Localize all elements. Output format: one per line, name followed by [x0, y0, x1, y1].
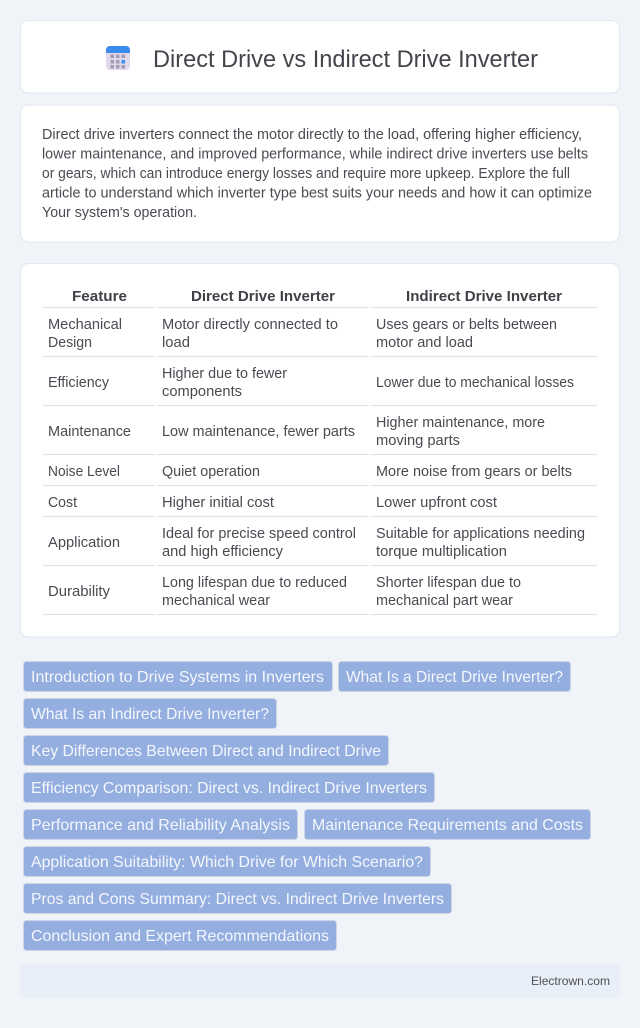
- table header: Indirect Drive Inverter: [406, 288, 562, 305]
- tag: [24, 772, 434, 802]
- tag: [24, 736, 388, 766]
- row: durability: Shorter lifespan due to: [376, 575, 521, 591]
- tag: Introduction to Drive Systems in Inverters: [31, 669, 324, 686]
- row: efficiency: [48, 366, 574, 400]
- header panel: [20, 20, 620, 93]
- icon: calendar: [106, 46, 130, 70]
- tag: [24, 698, 276, 728]
- row: efficiency: Lower due to mechanical losses: [376, 375, 574, 391]
- row: mechanical design: motor and load: [376, 335, 473, 351]
- row: mechanical design: Design: [48, 335, 92, 351]
- tag: What Is an Indirect Drive Inverter?: [31, 706, 269, 723]
- row: noise level: More noise from gears or belts: [376, 464, 572, 480]
- row: cost: [48, 495, 497, 511]
- tag: Conclusion and Expert Recommendations: [31, 928, 329, 945]
- panel: comparison table: [20, 264, 620, 637]
- footer: [20, 964, 620, 998]
- row: application: torque multiplication: [376, 544, 507, 560]
- tag: Efficiency Comparison: Direct vs. Indirect Drive Inverters: [31, 780, 427, 797]
- row: maintenance: [48, 415, 545, 449]
- tag: [24, 920, 336, 950]
- row: maintenance: Low maintenance, fewer parts: [162, 424, 355, 440]
- row: maintenance: Higher maintenance, more: [376, 415, 545, 431]
- row: maintenance: moving parts: [376, 433, 460, 449]
- row: noise level: [48, 464, 572, 480]
- topic tags: [24, 662, 590, 950]
- intro text: lower maintenance, and improved performance, while indirect drive inverters use belts: [42, 146, 588, 162]
- row: mechanical design: load: [162, 335, 190, 351]
- table header: [72, 288, 562, 305]
- tag: Maintenance Requirements and Costs: [312, 817, 583, 834]
- footer: Electrown.com: [531, 974, 610, 988]
- tag: [338, 662, 570, 692]
- row: durability: mechanical wear: [162, 593, 270, 609]
- row: durability: [48, 575, 521, 609]
- row: application: Suitable for applications needing: [376, 526, 585, 542]
- row: application: Application: [48, 535, 120, 551]
- intro text: [42, 127, 592, 221]
- title: Direct Drive vs Indirect Drive Inverter: [153, 46, 538, 73]
- row: durability: Durability: [48, 584, 111, 600]
- row: application: [48, 526, 585, 560]
- table header: Feature: [72, 288, 127, 305]
- row: application: and high efficiency: [162, 544, 284, 560]
- tag: [24, 884, 452, 914]
- row: mechanical design: Mechanical: [48, 317, 122, 333]
- tag: Pros and Cons Summary: Direct vs. Indirect Drive Inverters: [31, 891, 444, 908]
- row: noise level: Noise Level: [48, 464, 120, 480]
- row: maintenance: Maintenance: [48, 424, 131, 440]
- tag: Key Differences Between Direct and Indirect Drive: [31, 743, 381, 760]
- row: noise level: Quiet operation: [162, 464, 260, 480]
- row: mechanical design: Uses gears or belts between: [376, 317, 557, 333]
- intro text: Your system's operation.: [42, 205, 197, 221]
- row: application: Ideal for precise speed control: [162, 526, 356, 542]
- tag: [24, 810, 298, 840]
- tag: Application Suitability: Which Drive for Which Scenario?: [31, 854, 423, 871]
- row: mechanical design: [48, 317, 557, 351]
- intro text: article to understand which inverter type best suits your needs and how it can optimize: [42, 186, 592, 202]
- row: efficiency: Higher due to fewer: [162, 366, 287, 382]
- row: efficiency: components: [162, 384, 242, 400]
- table header: Direct Drive Inverter: [191, 288, 335, 305]
- tag: [24, 846, 430, 876]
- row: cost: Cost: [48, 495, 77, 511]
- row: durability: Long lifespan due to reduced: [162, 575, 347, 591]
- row: mechanical design: Motor directly connected to: [162, 317, 338, 333]
- tag: [304, 810, 590, 840]
- row: efficiency: Efficiency: [48, 375, 110, 391]
- row: cost: Lower upfront cost: [376, 495, 497, 511]
- row: durability: mechanical part wear: [376, 593, 513, 609]
- tag: What Is a Direct Drive Inverter?: [346, 669, 563, 686]
- tag: Performance and Reliability Analysis: [31, 817, 290, 834]
- intro text: or gears, which can introduce energy losses and require more upkeep. Explore the full: [42, 166, 570, 182]
- panel: introduction: [20, 105, 620, 242]
- intro text: Direct drive inverters connect the motor directly to the load, offering higher efficiency,: [42, 127, 582, 143]
- tag: [24, 662, 332, 692]
- row: cost: Higher initial cost: [162, 495, 274, 511]
